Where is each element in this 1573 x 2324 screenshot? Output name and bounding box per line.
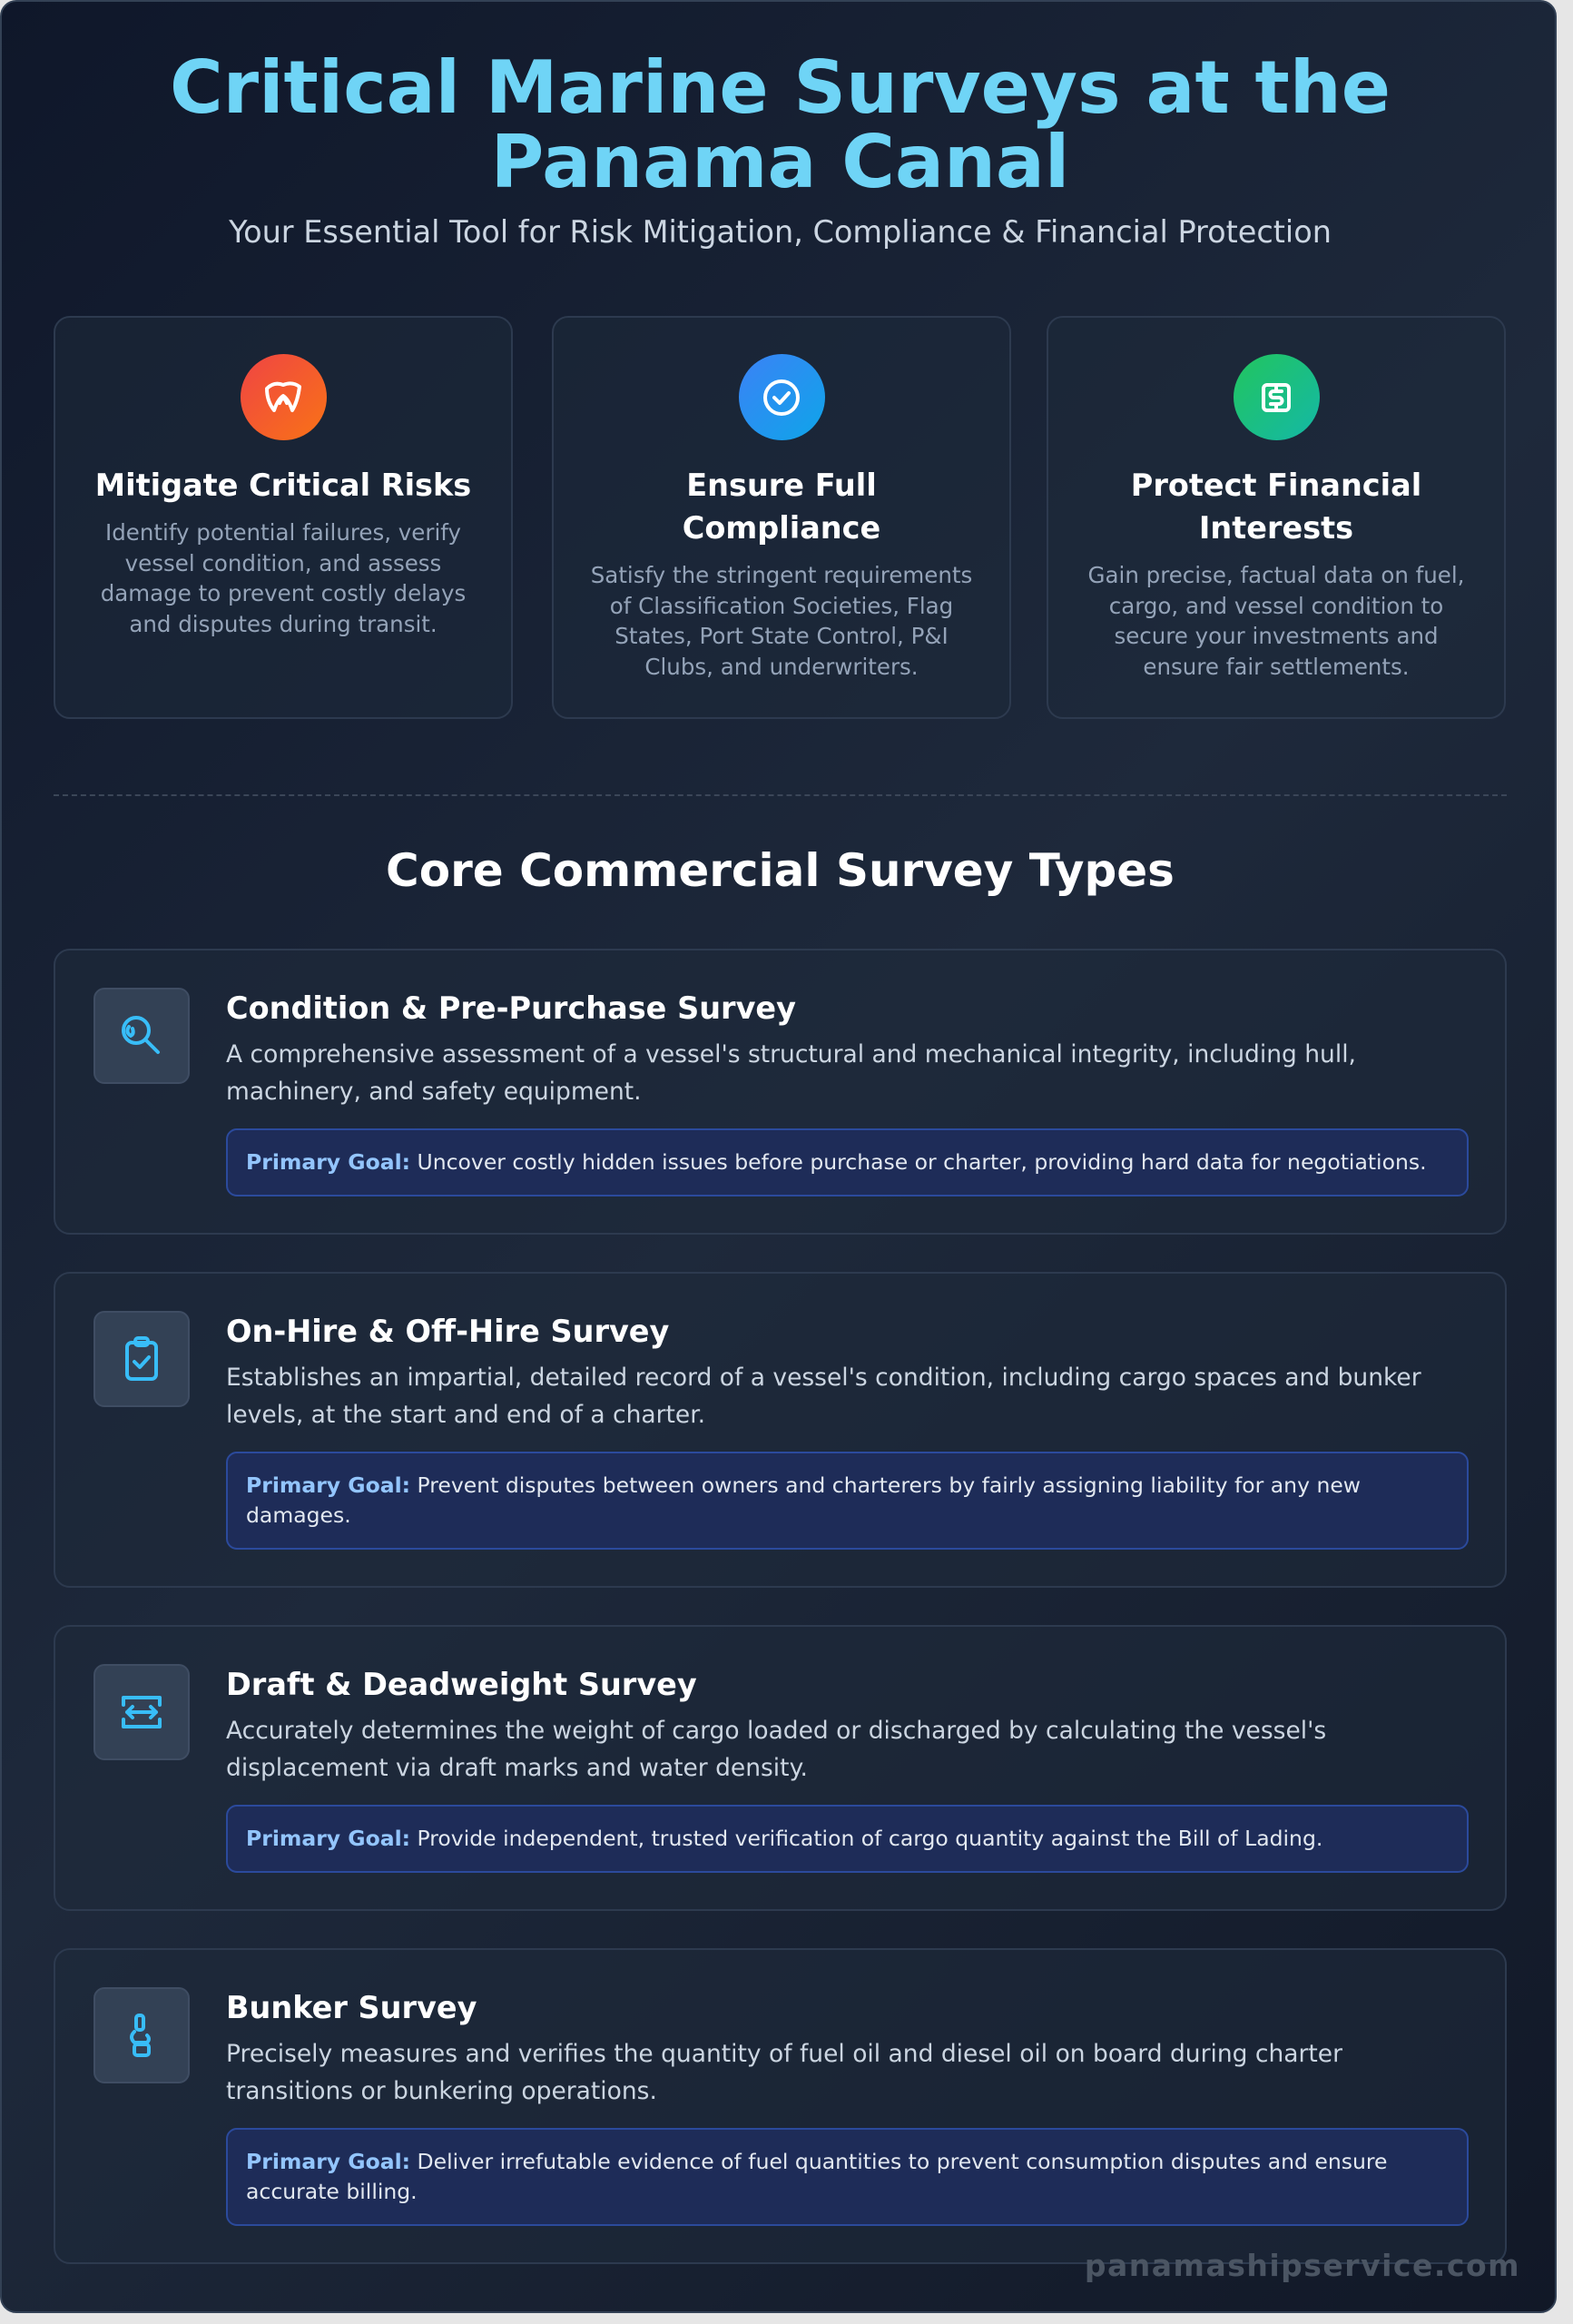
- heading: Condition & Pre-Purchase Survey: [226, 990, 796, 1026]
- heading: Mitigate Critical Risks: [95, 468, 471, 503]
- heading: [1131, 468, 1421, 546]
- title: Panama Canal: [491, 120, 1069, 204]
- callout: primary goal: [226, 1805, 1469, 1873]
- panel: mitigate risks: [54, 316, 513, 719]
- panel: draft survey: [54, 1625, 1507, 1911]
- icon: magnifier: [93, 988, 190, 1084]
- panel: financial: [1047, 316, 1506, 719]
- title: [170, 45, 1391, 204]
- text: Establishes an impartial, detailed record of a vessel's condition, including cargo spaces and bunker levels, at the start and end of a charter.: [226, 1364, 1421, 1429]
- callout: primary goal: [226, 2128, 1469, 2226]
- heading: Ensure Full: [686, 468, 877, 503]
- heading: Compliance: [683, 510, 880, 546]
- heading: Interests: [1199, 510, 1353, 546]
- text: Accurately determines the weight of cargo loaded or discharged by calculating the vessel's displacement via draft marks and water density.: [226, 1717, 1326, 1782]
- heading: [683, 468, 880, 546]
- panel: condition survey: [54, 949, 1507, 1235]
- text: A comprehensive assessment of a vessel's structural and mechanical integrity, including hull, machinery, and safety equipment.: [226, 1040, 1356, 1106]
- panel: compliance: [552, 316, 1011, 719]
- heading: Draft & Deadweight Survey: [226, 1667, 697, 1702]
- text: Gain precise, factual data on fuel, cargo, and vessel condition to secure your investments and ensure fair settlements.: [1088, 562, 1464, 679]
- callout: primary goal: [226, 1128, 1469, 1196]
- heading: Protect Financial: [1131, 468, 1421, 503]
- section heading: Core Commercial Survey Types: [386, 844, 1175, 897]
- heading: On-Hire & Off-Hire Survey: [226, 1314, 669, 1349]
- icon: check circle: [739, 354, 824, 440]
- icon: shield warning: [240, 354, 327, 440]
- callout: primary goal: Primary Goal: Provide independent, trusted verification of cargo quantity against the Bill of Lading.: [246, 1826, 1322, 1851]
- icon: arrows box: [93, 1664, 190, 1760]
- icon: clipboard: [93, 1311, 190, 1407]
- callout: primary goal: [226, 1452, 1469, 1550]
- icon: dollar: [1233, 354, 1320, 440]
- text: Identify potential failures, verify vessel condition, and assess damage to prevent costly delays and disputes during transit.: [101, 519, 466, 637]
- text: Precisely measures and verifies the quantity of fuel oil and diesel oil on board during charter transitions or bunkering operations.: [226, 2040, 1342, 2105]
- watermark: panamashipservice.com: [1085, 2248, 1520, 2283]
- icon: fuel: [93, 1987, 190, 2083]
- panel: bunker survey: [54, 1948, 1507, 2264]
- panel: on/off hire survey: [54, 1272, 1507, 1588]
- callout: primary goal: Primary Goal: Prevent disputes between owners and charterers by fairly assigning liability for any new damages.: [246, 1472, 1361, 1528]
- text: Satisfy the stringent requirements of Classification Societies, Flag States, Port State Control, P&I Clubs, and underwriters.: [591, 562, 972, 679]
- title: Critical Marine Surveys at the: [170, 45, 1391, 130]
- callout: primary goal: Primary Goal: Uncover costly hidden issues before purchase or charter, providing hard data for negotiations.: [246, 1149, 1427, 1175]
- subtitle: Your Essential Tool for Risk Mitigation, Compliance & Financial Protection: [229, 214, 1332, 250]
- callout: primary goal: Primary Goal: Deliver irrefutable evidence of fuel quantities to prevent consumption disputes and ensure accurate billing.: [246, 2149, 1387, 2204]
- heading: Bunker Survey: [226, 1990, 477, 2025]
